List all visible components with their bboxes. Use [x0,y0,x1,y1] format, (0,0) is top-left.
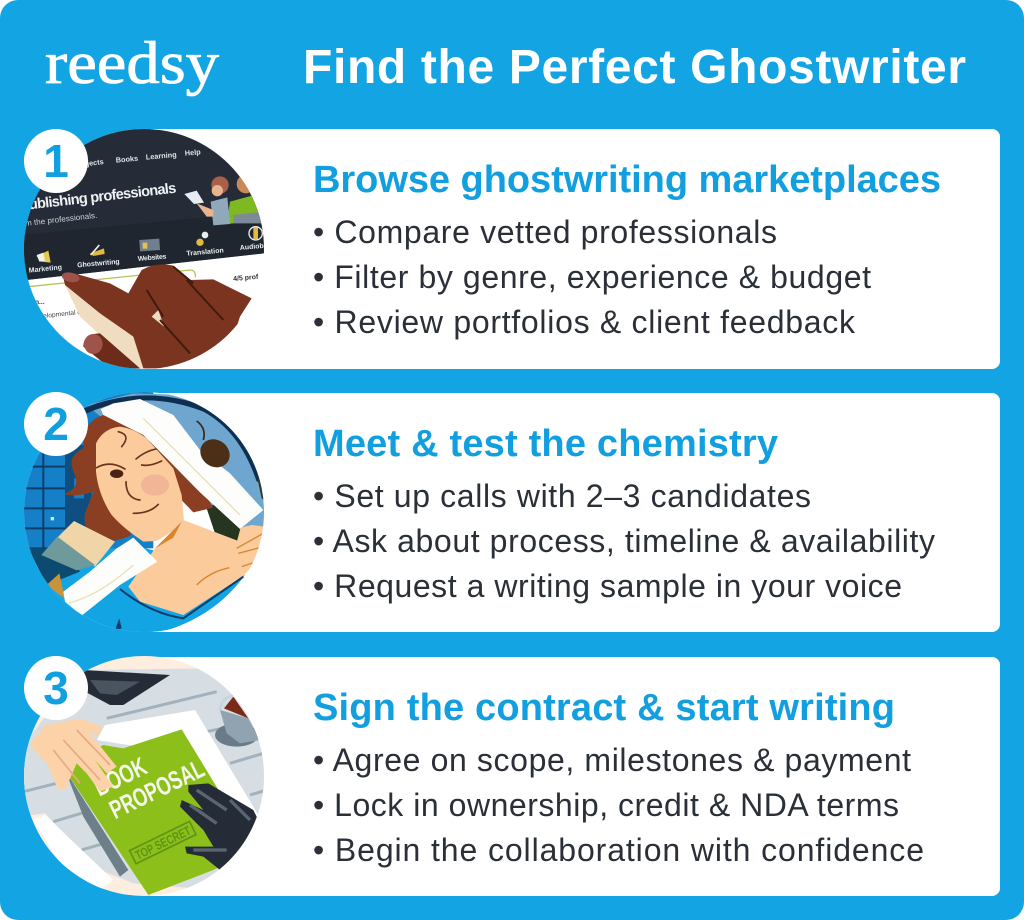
face details [97,432,162,513]
bullet list [313,742,924,868]
face [96,427,184,542]
nav text [87,150,200,168]
nav text: Help [184,147,202,158]
category labels: Websites [138,254,167,263]
gloved hand [180,783,260,870]
illustration: hand browsing website: n... [35,299,45,306]
card background [144,657,1000,896]
bullet list [313,214,871,340]
bullet list: • Review portfolios & client feedback [313,304,856,340]
illustration: winking woman with scarf [20,388,270,635]
title: Find the Perfect Ghostwriter [303,41,966,94]
panel: step 3 sign the contract [20,653,1000,900]
bullet list: • Set up calls with 2–3 candidates [313,478,811,514]
number badge 1 [24,129,88,193]
card background [144,393,1000,632]
bullet list: • Ask about process, timeline & availability [313,523,935,559]
category labels: Audiob [240,243,264,252]
dark tablet top [83,670,170,705]
dark scarf fold [206,504,240,540]
stamp: TOP SECRET [133,824,193,863]
category icons [37,227,262,263]
hand on right [237,525,264,574]
white paper [96,710,258,817]
logo: reedsy: reedsy [45,30,219,96]
scarf backdrop [87,393,267,528]
people [184,175,267,225]
nav text: Learning [145,150,177,162]
category labels: Translation [186,247,224,258]
heading: Meet & test the chemistry [313,423,778,465]
illustration: hand browsing website: m the professionals. [25,211,98,228]
bullet list: • Agree on scope, milestones & payment [313,742,911,778]
bullet list: • Lock in ownership, credit & NDA terms [313,787,899,823]
number badge 3 [24,656,88,720]
panel: step 2 meet and test [20,388,1000,635]
folder label text: PROPOSAL [104,753,209,825]
coffee cup [215,696,260,747]
bullet list: • Request a writing sample in your voice [313,568,902,604]
left hand [29,718,117,792]
search box outline [28,270,195,287]
panel: step 1 browse marketplaces [20,127,1000,373]
nav text: jects [85,157,104,168]
card background [144,129,1000,369]
bandage [101,399,263,529]
heading: Browse ghostwriting marketplaces [313,159,941,201]
tan striped fabric [57,521,115,567]
heading text in screenshot: ublishing professionals [28,181,177,213]
number badge 1: 1 [43,135,69,187]
category labels: Marketing [28,264,62,275]
folder [69,778,128,876]
shoulder and neck [128,520,245,615]
bullet list [313,478,935,604]
illustration: book proposal folder [20,653,270,900]
heading: Sign the contract & start writing [313,687,895,729]
nav text: Books [115,154,138,165]
hair [65,414,213,542]
folder label text: BOOK [89,751,152,802]
folder label text [94,756,206,819]
illustration: hand browsing website: elopmental edi [43,308,87,320]
number badge 2 [24,392,88,456]
hand [61,264,252,368]
category labels: Ghostwriting [77,259,120,269]
category labels [28,243,264,275]
illustration: hand browsing website [20,127,270,373]
bullet list: • Compare vetted professionals [313,214,777,250]
dress collar [126,582,240,632]
number badge 3: 3 [43,662,69,714]
bullet list: • Begin the collaboration with confidence [313,832,924,868]
bullet list: • Filter by genre, experience & budget [313,259,871,295]
illustration: hand browsing website: 4/5 prof [233,274,259,283]
stamp [130,821,196,864]
number badge 2: 2 [43,398,69,450]
white cloth [63,538,157,616]
